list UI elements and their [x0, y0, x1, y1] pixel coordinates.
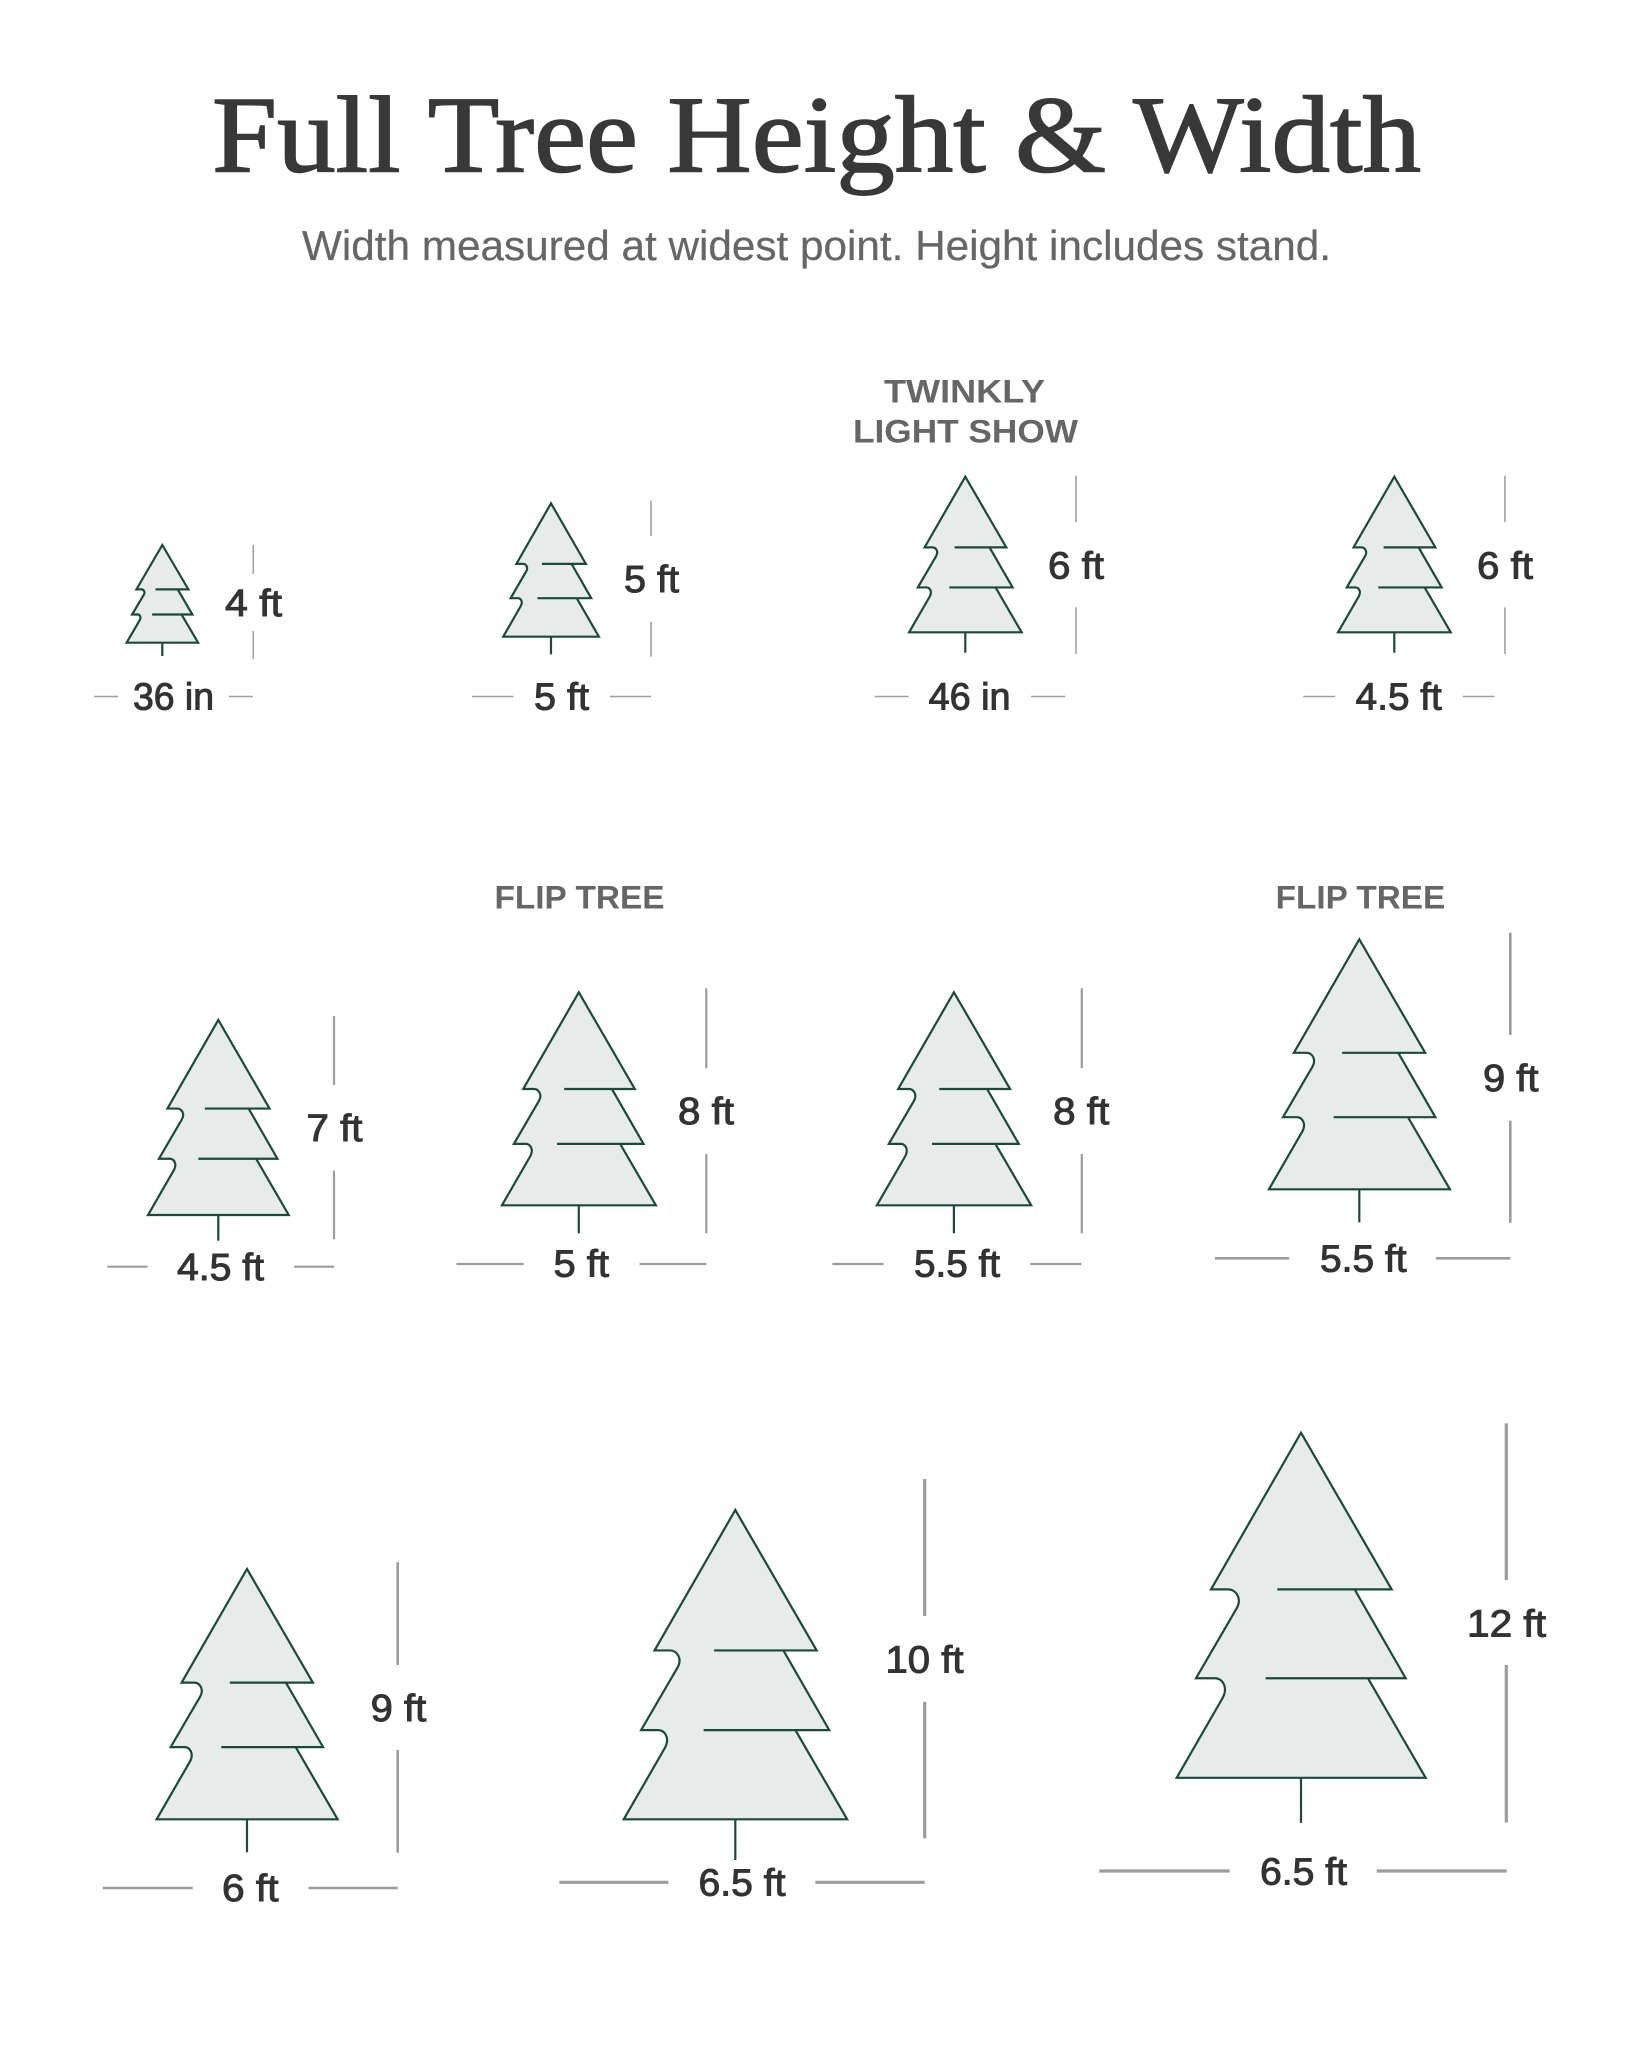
label: Twinkly Light Show: TWINKLY — [884, 373, 1045, 409]
icon: tree — [877, 992, 1031, 1233]
icon: tree — [503, 503, 599, 654]
icon: tree — [1338, 477, 1451, 653]
subtitle: Width measured at widest point. Height includes stand. — [302, 222, 1331, 269]
width measure: 5 ft: 5 ft — [534, 676, 589, 718]
height measure: 7 ft: 7 ft — [306, 1108, 363, 1150]
height measure: 9 ft: 9 ft — [371, 1688, 427, 1730]
width measure: 4.5 ft: 4.5 ft — [1356, 676, 1442, 718]
height measure: 8 ft: 8 ft — [1053, 1091, 1110, 1133]
icon: tree — [1177, 1433, 1426, 1823]
label: Twinkly Light Show: LIGHT SHOW — [853, 414, 1079, 450]
width measure: 36 in: 36 in — [133, 676, 214, 718]
panel: 10 ft tree, 6.5 ft wide — [559, 1479, 964, 1905]
icon: tree — [624, 1510, 847, 1860]
icon: tree — [148, 1020, 289, 1241]
width measure: 4.5 ft: 4.5 ft — [177, 1247, 264, 1289]
height measure: 5 ft: 5 ft — [624, 559, 679, 601]
height measure: 12 ft: 12 ft — [1467, 1604, 1546, 1646]
height measure: 6 ft: 6 ft — [1048, 545, 1104, 587]
icon: tree — [157, 1569, 338, 1852]
icon: tree — [909, 477, 1022, 653]
width measure: 46 in: 46 in — [929, 676, 1011, 718]
panel: Flip Tree, 8 ft, 5 ft wide — [456, 880, 734, 1286]
title: Full Tree Height & Width — [212, 74, 1421, 196]
width measure: 6 ft: 6 ft — [222, 1868, 279, 1910]
height measure: 4 ft: 4 ft — [225, 583, 282, 625]
panel: Twinkly Light Show tree, 6 ft, 46 in wide — [853, 373, 1104, 718]
height measure: 9 ft: 9 ft — [1483, 1058, 1539, 1100]
panel: 12 ft tree, 6.5 ft wide — [1099, 1423, 1546, 1894]
height measure: 4 ft — [225, 545, 282, 659]
label: Flip Tree: FLIP TREE — [1276, 880, 1445, 916]
panel: Flip Tree, 9 ft, 5.5 ft wide — [1215, 880, 1539, 1281]
label: Flip Tree: FLIP TREE — [494, 880, 664, 916]
panel: 7 ft tree, 4.5 ft wide — [107, 1016, 363, 1289]
width measure: 6.5 ft: 6.5 ft — [698, 1863, 786, 1905]
width measure: 5 ft: 5 ft — [554, 1244, 609, 1286]
label: Twinkly Light Show — [853, 373, 1079, 450]
panel: 8 ft tree, 5.5 ft wide — [832, 988, 1110, 1286]
panel: 6 ft tree, 4.5 ft wide — [1303, 476, 1533, 718]
icon: tree — [127, 545, 198, 656]
panel: 9 ft tree, 6 ft wide — [103, 1562, 427, 1910]
height measure: 6 ft: 6 ft — [1477, 545, 1533, 587]
height measure: 8 ft: 8 ft — [678, 1091, 734, 1133]
width measure: 6.5 ft: 6.5 ft — [1260, 1852, 1347, 1894]
panel: 5 ft tree, 5 ft wide — [472, 501, 679, 718]
height measure: 10 ft: 10 ft — [886, 1639, 964, 1681]
panel: 4 ft tree, 36 in wide — [94, 545, 282, 718]
width measure: 5.5 ft: 5.5 ft — [1320, 1239, 1407, 1281]
icon: tree — [502, 992, 656, 1233]
width measure: 5.5 ft: 5.5 ft — [914, 1244, 1000, 1286]
icon: tree — [1269, 939, 1450, 1222]
